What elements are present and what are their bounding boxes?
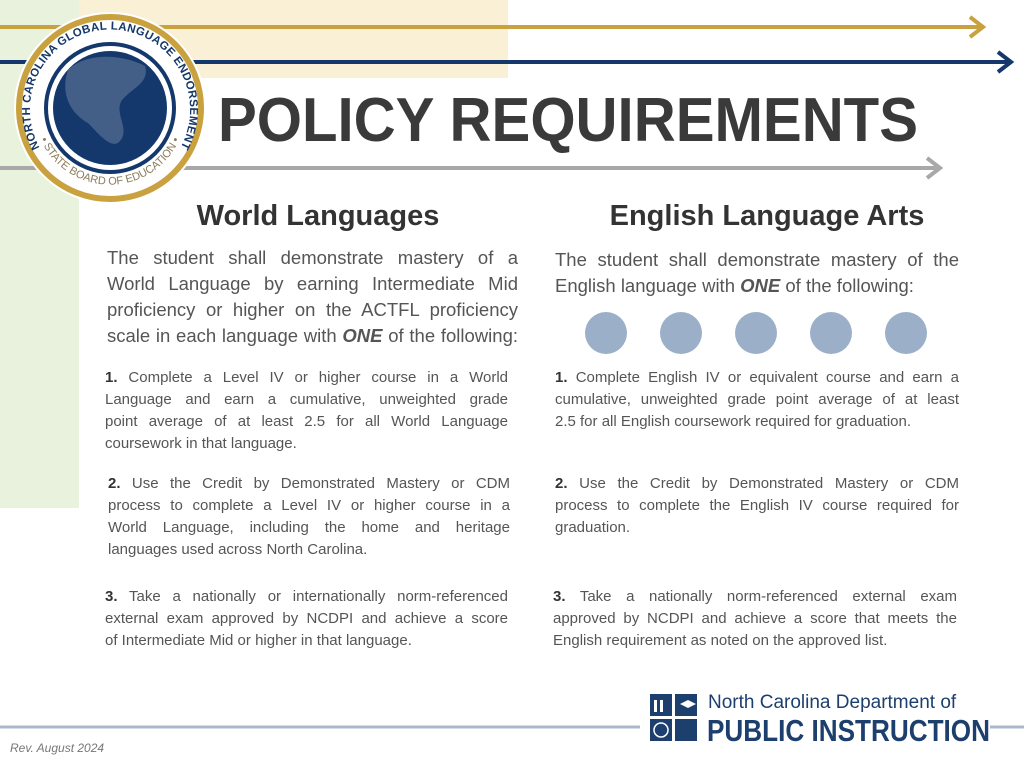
WL item 3: 3. Take a nationally or internationally norm-referenced bbox=[105, 588, 508, 605]
ELA item 1: 2.5 for all English coursework required for graduation. bbox=[555, 413, 911, 430]
footer logo: NC DPI bbox=[650, 692, 990, 746]
WL item 2: World Language, including the home and heritage bbox=[108, 519, 510, 536]
text: world languages intro: scale in each language with ONE of the following: bbox=[107, 325, 518, 346]
heading: English Language Arts: English Language Arts bbox=[610, 200, 924, 232]
heading: World Languages: World Languages bbox=[197, 200, 439, 232]
ELA item 1: 1. Complete English IV or equivalent course and earn a bbox=[555, 369, 959, 386]
WL item 2: process to complete a Level IV or higher course in a bbox=[108, 497, 510, 514]
WL item 2: languages used across North Carolina. bbox=[108, 541, 367, 558]
text: ELA intro bbox=[555, 249, 959, 296]
WL item 3: of Intermediate Mid or higher in that language. bbox=[105, 632, 412, 649]
ELA item 1 bbox=[555, 369, 959, 430]
WL item 2: 2. Use the Credit by Demonstrated Mastery or CDM bbox=[108, 475, 510, 492]
logo: NC Global Language Endorsement seal bbox=[14, 12, 204, 202]
text: world languages intro bbox=[107, 247, 518, 346]
WL item 3: external exam approved by NCDPI and achieve a score bbox=[105, 610, 508, 627]
footer logo: NC DPI: North Carolina Department of bbox=[708, 692, 956, 713]
WL item 3 bbox=[105, 588, 508, 649]
ELA item 2: 2. Use the Credit by Demonstrated Mastery or CDM bbox=[555, 475, 959, 492]
ELA item 3: 3. Take a nationally norm-referenced external exam bbox=[553, 588, 957, 605]
logo: NC Global Language Endorsement seal: • STATE BOARD OF EDUCATION • bbox=[43, 138, 177, 185]
ELA item 3: approved by NCDPI and achieve a score that meets the bbox=[553, 610, 957, 627]
ELA item 2: graduation. bbox=[555, 519, 630, 536]
text: ELA intro: The student shall demonstrate mastery of the bbox=[555, 249, 959, 270]
WL item 2 bbox=[108, 475, 510, 558]
WL item 1: coursework in that language. bbox=[105, 435, 297, 452]
text: world languages intro: World Language by earning Intermediate Mid bbox=[107, 273, 518, 294]
WL item 1 bbox=[105, 369, 508, 452]
ELA item 2: process to complete the English IV course required for bbox=[555, 497, 959, 514]
revision note: Rev. August 2024 bbox=[10, 741, 104, 755]
text: world languages intro: The student shall demonstrate mastery of a bbox=[107, 247, 518, 268]
text: ELA intro: English language with ONE of the following: bbox=[555, 275, 914, 296]
ELA item 3 bbox=[553, 588, 957, 649]
decorative circles bbox=[585, 312, 927, 354]
logo: NC Global Language Endorsement seal: NORTH CAROLINA GLOBAL LANGUAGE ENDORSEMENT bbox=[22, 22, 198, 151]
ELA item 2 bbox=[555, 475, 959, 536]
WL item 1: point average of at least 2.5 for all World Language bbox=[105, 413, 508, 430]
ELA item 3: English requirement as noted on the approved list. bbox=[553, 632, 887, 649]
ELA item 1: cumulative, unweighted grade point average of at least bbox=[555, 391, 959, 408]
WL item 1: Language and earn a cumulative, unweighted grade bbox=[105, 391, 508, 408]
text: world languages intro: proficiency or higher on the ACTFL proficiency bbox=[107, 299, 518, 320]
WL item 1: 1. Complete a Level IV or higher course in a World bbox=[105, 369, 508, 386]
